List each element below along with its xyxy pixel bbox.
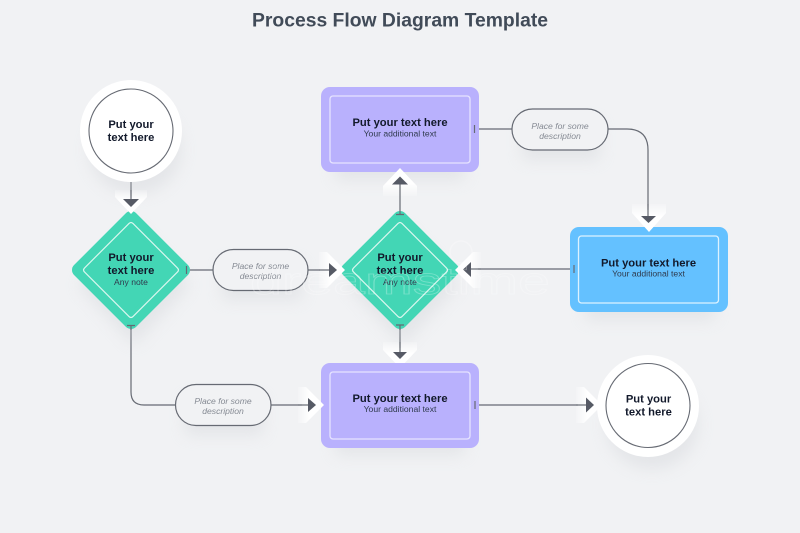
process box: bottom: Your additional text [364,404,437,414]
arrow: down into first decision [115,190,147,214]
arrow: right into bottom process [298,387,324,423]
end circle: text here [625,406,672,418]
watermark: dreamstime [250,261,550,303]
description pill: top right: description [539,131,581,141]
process box: top [321,87,479,180]
process box: bottom [321,363,479,455]
decision diamond: first: Any note [114,277,148,287]
process box: bottom: Put your text here [352,393,448,405]
end circle [597,355,699,469]
description pill: left: description [240,271,281,281]
description pill: top right: Place for some [531,121,589,131]
decision diamond: middle: Any note [383,277,417,287]
description pill: left [213,250,308,300]
start circle: Put your [108,119,154,131]
connector: top process to blue process [474,129,648,210]
decision diamond: first: text here [108,265,154,277]
start circle [80,80,182,194]
connector: first decision to description pill [186,269,320,271]
connector: first decision to lower description and process [131,326,302,405]
connector: blue process to middle decision [478,268,574,270]
arrow: down into blue process [632,204,666,232]
description pill: bottom: Place for some [194,396,252,406]
connector: bottom process to end circle [475,404,578,406]
decision diamond: middle: Put your [377,252,423,264]
arrow: right into end circle [576,387,602,423]
process box: blue: Your additional text [612,268,685,278]
decision diamond: first [78,218,190,345]
arrow: left into middle decision [455,252,481,288]
start circle: text here [108,132,154,144]
process box: blue: Put your text here [601,258,696,270]
arrow: down into bottom process [383,342,417,368]
description pill: left: Place for some [232,261,289,271]
connector: start circle to first decision [127,177,135,198]
description pill: bottom: description [202,406,244,416]
end circle: Put your [626,394,672,406]
description pill: top right [512,109,608,160]
process box: blue [570,227,728,320]
arrow: right into middle decision [319,252,345,288]
decision diamond: middle: text here [377,265,423,277]
description pill: bottom [176,384,271,435]
connector: middle decision down to bottom process [399,326,401,348]
decision diamond: first: Put your [108,252,154,264]
arrow: up into top process [383,168,417,214]
process box: top: Your additional text [364,128,437,138]
watermark [250,241,550,303]
process box: top: Put your text here [352,117,448,129]
decision diamond: middle [347,214,459,345]
title: Process Flow Diagram Template [252,10,548,32]
